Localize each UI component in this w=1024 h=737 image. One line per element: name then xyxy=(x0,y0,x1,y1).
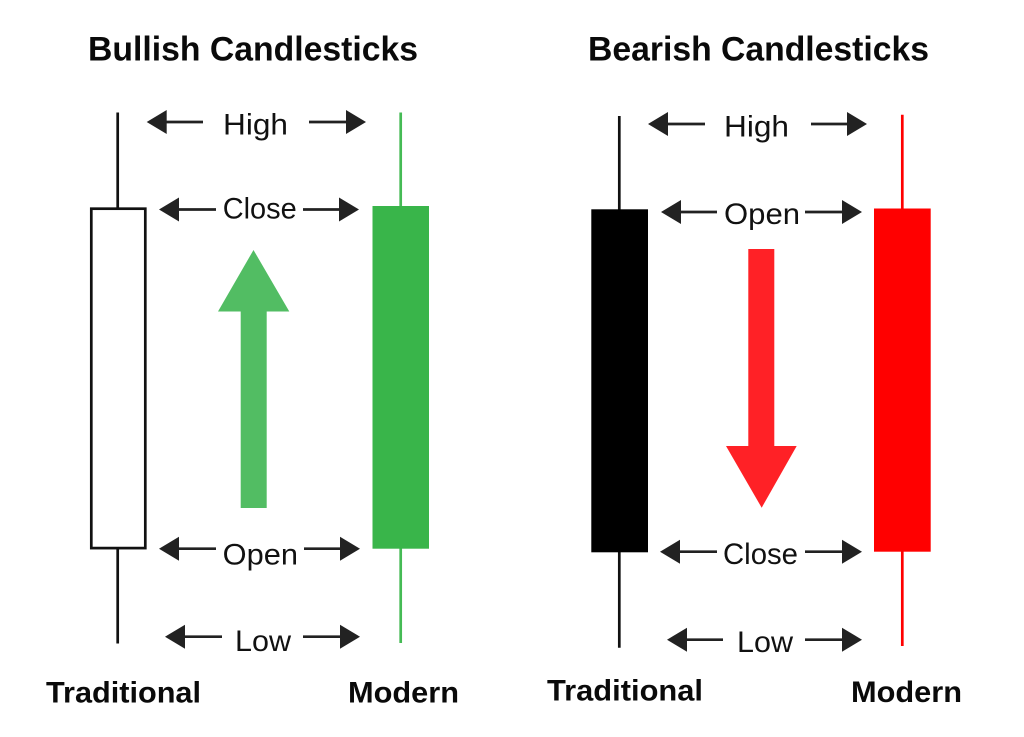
label: high bearish: High xyxy=(724,111,789,144)
title: bearish candlesticks: Bearish Candlesticks xyxy=(588,30,929,68)
title: bullish candlesticks: Bullish Candlesticks xyxy=(88,30,418,68)
arrow: bearish down xyxy=(726,249,797,508)
label: low bearish: Low xyxy=(737,626,793,659)
label: open bullish: Open xyxy=(223,538,298,571)
label: open bearish: Open xyxy=(724,198,800,231)
label: close bullish xyxy=(159,192,359,225)
caption: modern bearish: Modern xyxy=(851,676,962,709)
caption: modern bullish: Modern xyxy=(348,677,459,710)
caption: traditional bearish: Traditional xyxy=(547,675,703,708)
label: low bearish xyxy=(667,626,862,659)
label: high bullish xyxy=(147,108,366,141)
arrow: bullish up xyxy=(218,250,289,508)
candlestick: bullish traditional xyxy=(91,112,145,644)
label: close bearish: Close xyxy=(723,538,798,571)
label: open bullish xyxy=(159,537,360,571)
label: close bullish: Close xyxy=(223,192,297,225)
label: close bearish xyxy=(660,538,862,571)
label: open bearish xyxy=(661,198,862,231)
candlestick: bearish traditional xyxy=(591,116,648,648)
label: high bearish xyxy=(648,111,867,144)
candlestick: bullish modern xyxy=(372,112,429,643)
label: high bullish: High xyxy=(223,108,288,141)
caption: traditional bullish: Traditional xyxy=(46,677,201,710)
label: low bullish xyxy=(165,625,360,658)
label: low bullish: Low xyxy=(235,625,291,658)
candlestick: bearish modern xyxy=(874,115,931,646)
